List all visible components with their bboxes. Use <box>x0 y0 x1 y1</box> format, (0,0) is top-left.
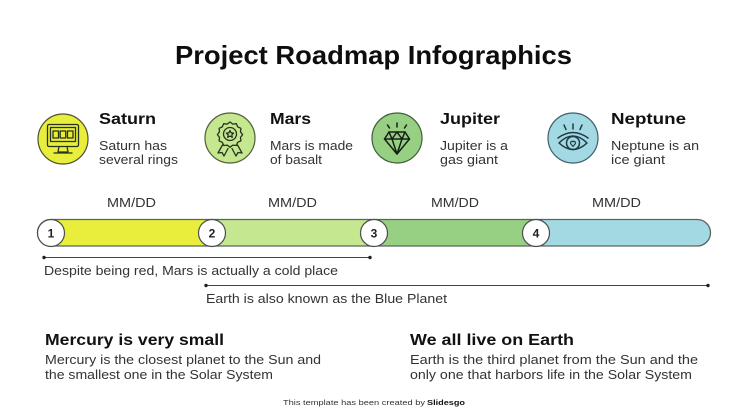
date labels: MM/DD <box>268 196 317 210</box>
footer credit <box>283 398 465 407</box>
heading: Neptune: Neptune <box>611 111 686 128</box>
panel: Neptune <box>548 111 699 167</box>
text: Saturn description: Saturn has <box>99 139 167 153</box>
date labels: MM/DD <box>431 196 479 210</box>
text block: Mercury: Mercury is very small <box>45 332 224 349</box>
text block: Earth <box>410 332 698 382</box>
icon: computer monitor <box>38 114 88 164</box>
heading: Saturn: Saturn <box>99 111 156 128</box>
title: Project Roadmap Infographics <box>175 40 572 70</box>
text block: Mercury: Mercury is the closest planet to the Sun and <box>45 353 321 367</box>
icon: award rosette <box>205 113 255 163</box>
milestone 4: 4 <box>533 226 540 240</box>
text block: Mercury <box>45 332 321 382</box>
span: Earth note: Earth is also known as the Blue Planet <box>206 292 448 306</box>
icon: eye <box>548 113 598 163</box>
text: Jupiter description: Jupiter is a <box>440 139 508 153</box>
text: Neptune description: Neptune is an <box>611 139 699 153</box>
milestone 4 <box>522 220 550 246</box>
footer credit: This template has been created by <box>283 398 425 407</box>
panel: Saturn <box>38 111 178 167</box>
milestone 1 <box>38 220 64 246</box>
panel: Mars <box>205 111 353 167</box>
text: Jupiter description: gas giant <box>440 153 499 167</box>
text: Mars description: of basalt <box>270 153 323 167</box>
text: Saturn description <box>99 139 178 167</box>
text: Mars description: Mars is made <box>270 139 353 153</box>
roadmap progress bar <box>38 220 710 246</box>
text block: Earth: We all live on Earth <box>410 332 574 349</box>
date labels: MM/DD <box>107 196 156 210</box>
icon: diamond <box>372 113 422 163</box>
date labels: MM/DD <box>592 196 641 210</box>
milestone 2 <box>198 220 226 246</box>
heading: Mars: Mars <box>270 111 311 128</box>
span: Earth note <box>204 284 710 306</box>
milestone 2: 2 <box>209 226 216 240</box>
text: Mars description <box>270 139 353 167</box>
heading: Jupiter: Jupiter <box>440 111 500 128</box>
span: Mars note: Despite being red, Mars is actually a cold place <box>44 264 338 278</box>
panel: Jupiter <box>372 111 508 167</box>
text: Saturn description: several rings <box>99 153 178 167</box>
text block: Mercury: the smallest one in the Solar System <box>45 368 273 382</box>
milestone 3 <box>360 220 388 246</box>
text: Jupiter description <box>440 139 508 167</box>
date labels <box>107 196 641 210</box>
span: Mars note <box>42 256 372 278</box>
text: Neptune description <box>611 139 699 167</box>
footer credit: Slidesgo <box>427 398 465 407</box>
text: Neptune description: ice giant <box>611 153 666 167</box>
text block: Earth: Earth is the third planet from the Sun and the <box>410 353 698 367</box>
text block: Earth: only one that harbors life in the Solar System <box>410 368 692 382</box>
milestone 1: 1 <box>48 226 55 240</box>
milestone 3: 3 <box>371 226 378 240</box>
